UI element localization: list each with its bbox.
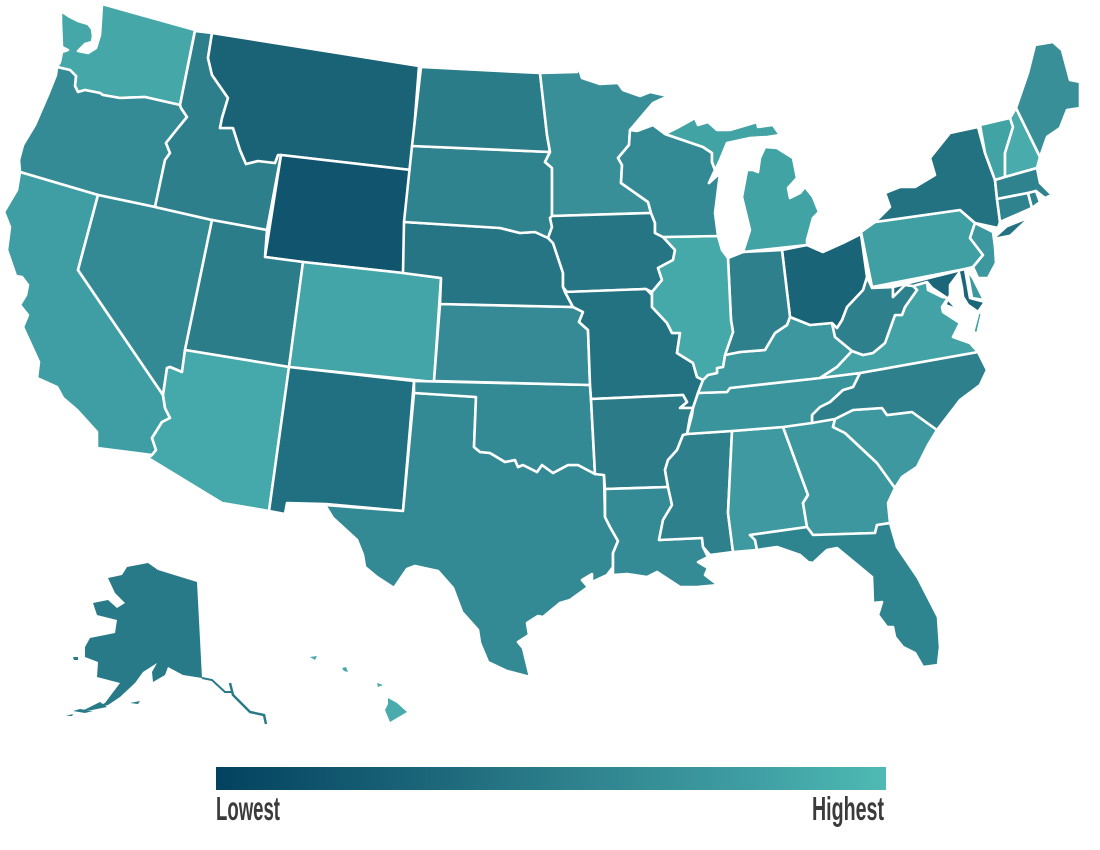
legend: colour scale bar: [216, 767, 886, 790]
map: contiguous United States choropleth: [4, 4, 1080, 677]
state: North Carolina: [812, 352, 987, 430]
legend label: lowest: Lowest: [216, 790, 280, 827]
legend label: highest: Highest: [812, 790, 884, 827]
state: Idaho: [155, 31, 281, 230]
state: Vermont: [980, 118, 1013, 180]
state: New Hampshire: [1005, 108, 1040, 177]
state: Indiana: [725, 250, 790, 355]
state: Maine: [1016, 42, 1080, 157]
state: New York: [875, 127, 1000, 228]
state: Colorado: [289, 262, 441, 382]
state: Nevada: [78, 195, 212, 395]
state: Arizona: [148, 350, 289, 511]
state: Massachusetts: [995, 168, 1058, 199]
state: Missouri: [565, 289, 703, 408]
state: Ohio: [782, 234, 867, 328]
state: New Mexico: [269, 367, 414, 514]
state: West Virginia: [832, 277, 917, 355]
state: Georgia: [783, 419, 895, 535]
state: Louisiana: [605, 487, 718, 587]
state: Connecticut: [997, 193, 1032, 222]
state: Iowa: [548, 213, 675, 292]
state: Alabama: [728, 427, 808, 552]
state: Virginia: [820, 282, 978, 378]
inset: Alaska: [66, 563, 266, 724]
state: Maryland: [893, 269, 985, 312]
state: Montana: [208, 33, 419, 170]
inset: Hawaii: [310, 656, 407, 722]
state: Utah: [185, 220, 303, 367]
state: Texas: [325, 393, 618, 677]
state: Oklahoma: [414, 381, 595, 474]
state: Florida: [750, 523, 940, 667]
state: Mississippi: [659, 431, 733, 555]
state: Nebraska: [403, 222, 573, 307]
state: North Dakota: [412, 67, 550, 152]
state: Pennsylvania: [861, 210, 983, 287]
state: Rhode Island: [1028, 191, 1040, 208]
state: Illinois: [652, 236, 733, 380]
state: Virginia eastern shore: [974, 313, 981, 332]
state: South Carolina: [833, 408, 937, 488]
state: Kansas: [434, 304, 590, 385]
state: Delaware: [967, 270, 984, 300]
state: Long Island, New York: [995, 219, 1027, 238]
state: California: [4, 172, 170, 455]
state: Michigan upper peninsula: [665, 118, 780, 183]
state: Washington: [57, 4, 195, 105]
state: South Dakota: [404, 146, 552, 238]
state: Oregon: [19, 67, 187, 207]
state: Wisconsin: [618, 125, 720, 237]
state: Kentucky: [698, 317, 852, 393]
state: Tennessee: [687, 373, 860, 434]
state: Wyoming: [265, 155, 411, 273]
state: Minnesota: [540, 63, 668, 216]
state: Arkansas: [591, 395, 693, 489]
state: Michigan lower peninsula: [742, 147, 819, 252]
state: New Jersey: [970, 223, 996, 278]
